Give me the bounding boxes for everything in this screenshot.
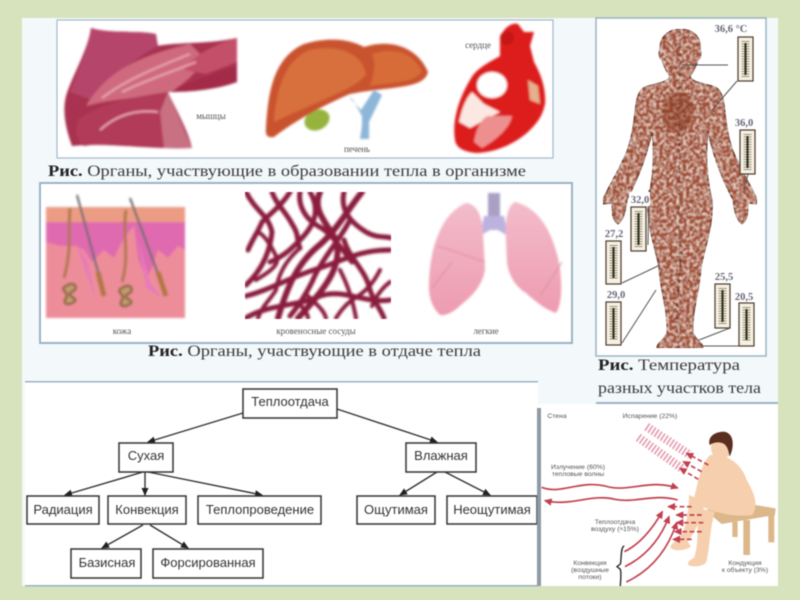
label: skin: кожа	[113, 326, 131, 336]
caption: heat production: Рис. Органы, участвующие в образовании тепла в организме	[48, 163, 526, 180]
caption: heat release: Рис. Органы, участвующие в отдаче тепла	[148, 343, 481, 360]
panel: heat-producing organs	[57, 20, 553, 158]
diagram labels: Конвекция	[573, 560, 607, 567]
caption: body temperature: Рис. Температура	[598, 357, 740, 374]
box: Ощутимая: Ощутимая	[364, 502, 428, 517]
box: Теплоотдача	[243, 389, 337, 418]
image: skin	[46, 195, 185, 318]
image: liver	[266, 40, 428, 139]
diagram labels: Кондукция	[728, 560, 762, 567]
figure: body silhouette	[603, 29, 757, 348]
label: lungs: легкие	[473, 326, 499, 336]
diagram labels: к объекту (3%)	[722, 566, 768, 574]
temperature labels: 36,6 °C	[715, 24, 747, 35]
thermometer 36,0	[740, 130, 755, 174]
label: liver: печень	[344, 144, 370, 154]
box: Радиация	[27, 496, 99, 524]
temperature labels: 25,5	[715, 272, 733, 283]
image: lungs	[429, 193, 562, 315]
box: Неощутимая	[447, 496, 537, 524]
box: Базисная: Базисная	[79, 555, 135, 570]
box: Форсированная: Форсированная	[160, 555, 256, 570]
seated man illustration	[542, 427, 776, 586]
panel: heat exchange diagram	[537, 404, 778, 586]
thermometer 27,2	[606, 241, 621, 284]
label: heart: сердце	[465, 40, 491, 50]
panel: heat loss flow chart	[25, 381, 538, 586]
box: Сухая	[119, 443, 173, 472]
image: muscles	[64, 28, 237, 148]
box: Теплопроведение	[198, 496, 321, 524]
brace	[617, 546, 624, 586]
wall	[537, 408, 541, 586]
thermometer 36,6	[738, 37, 753, 81]
temperature labels	[605, 24, 753, 303]
panel: body temperature	[596, 18, 766, 356]
icon: heart area on body	[662, 92, 694, 132]
box: Конвекция: Конвекция	[115, 502, 179, 517]
image: blood vessels	[246, 192, 392, 318]
diagram labels: Стена	[547, 413, 567, 420]
diagram labels: Испарение (22%)	[623, 413, 677, 420]
temperature labels: 29,0	[607, 290, 625, 301]
thermometer 20,5	[739, 303, 754, 346]
body	[670, 435, 756, 566]
box: Неощутимая: Неощутимая	[453, 502, 531, 517]
temperature labels: 32,0	[631, 195, 649, 206]
label background: 32,0	[629, 192, 650, 206]
diagram labels: Теплоотдача	[595, 519, 635, 526]
caption: body temperature: разных участков тела	[598, 380, 761, 397]
caption underline	[596, 402, 778, 404]
label: blood vessels: кровеносные сосуды	[276, 326, 356, 336]
temperature labels: 36,0	[735, 118, 753, 129]
dashed evaporation arrows	[668, 453, 708, 539]
box: Ощутимая	[357, 496, 435, 524]
caption: body temperature	[598, 357, 761, 397]
thermometer lead lines	[622, 65, 748, 346]
box: Радиация: Радиация	[33, 502, 93, 517]
stool	[705, 505, 776, 555]
image: heart	[454, 24, 545, 153]
box: Форсированная	[153, 549, 263, 578]
evaporation coils	[638, 427, 690, 468]
diagram labels: (воздушные	[571, 567, 609, 574]
box: Теплопроведение: Теплопроведение	[206, 502, 314, 517]
temperature labels: 20,5	[735, 292, 753, 303]
box: Теплоотдача: Теплоотдача	[251, 394, 329, 409]
hair	[709, 432, 733, 457]
thermometer 29,0	[606, 302, 621, 345]
diagram labels: потоки)	[578, 574, 602, 581]
box: Влажная: Влажная	[414, 448, 468, 463]
flow chart arrows	[65, 409, 490, 548]
thermometer 25,5	[715, 284, 730, 328]
diagram labels	[547, 413, 768, 581]
thermometer 32,0	[631, 207, 646, 251]
panel: heat-releasing organs	[40, 183, 572, 343]
temperature labels: 27,2	[605, 229, 623, 240]
radiation wave arrows	[542, 485, 678, 582]
box: Сухая: Сухая	[128, 448, 164, 463]
label: muscles: мышцы	[196, 111, 226, 121]
box: Конвекция	[108, 496, 186, 524]
box: Влажная	[406, 443, 476, 472]
diagram labels: воздуху (≈15%)	[591, 526, 639, 533]
diagram labels: тепловые волны	[552, 471, 604, 478]
diagram labels: Излучение (60%)	[551, 464, 605, 471]
box: Базисная	[71, 549, 141, 578]
